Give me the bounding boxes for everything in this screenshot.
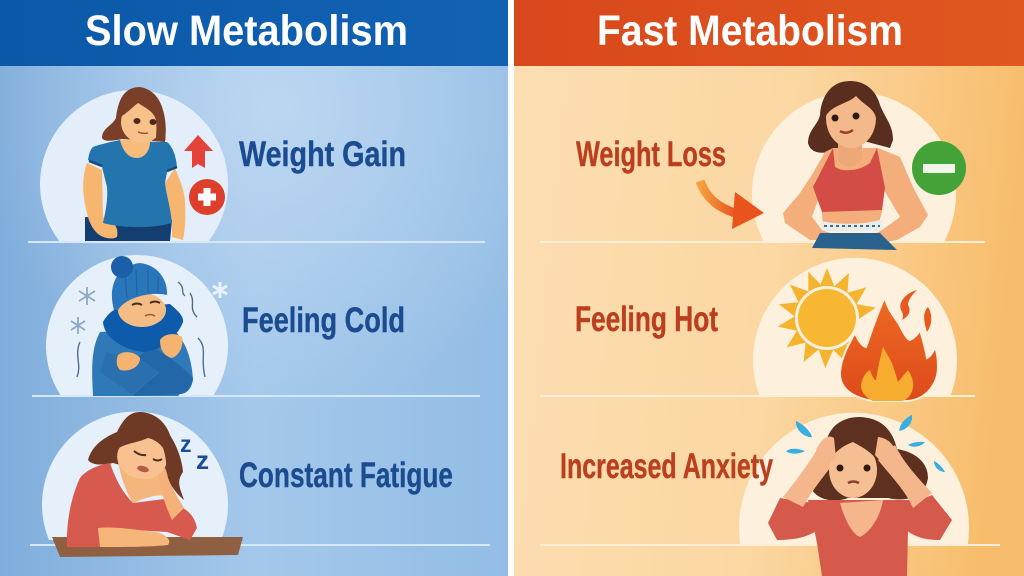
illustration: woman shivering in scarf and hat [92,256,193,396]
icon: sleep letters: z [196,445,209,475]
panel background: orange [514,66,1024,576]
divider line [28,241,485,243]
illustration: tired woman resting head [67,412,197,547]
header bar: slow metabolism: Slow Metabolism [85,7,408,55]
backdrop circle: feeling hot [753,258,957,396]
icon: flame [840,290,938,401]
symptom row: constant fatigue [30,412,490,557]
illustration: anxious woman holding head [768,417,952,576]
icon: sleep letters: z [180,431,192,457]
table [52,537,243,557]
divider line [32,395,480,397]
icon: sun [776,268,878,368]
symptom row: feeling hot [540,258,975,401]
divider line [540,241,985,243]
symptom row: weight loss [540,81,985,250]
icon: sweat drops [786,415,945,472]
icon: up arrow [184,135,213,168]
panel: fast metabolism [514,0,1024,576]
icon: minus badge [912,141,966,195]
panel background: blue [0,66,508,576]
backdrop circle: weight loss [752,92,956,242]
symptom row: increased anxiety [540,413,1000,576]
backdrop circle: constant fatigue [42,412,228,540]
label: feeling cold: Feeling Cold [242,301,405,340]
label: weight gain: Weight Gain [239,135,406,174]
illustration: woman with weight gain [83,87,185,241]
illustration: slim woman with measuring tape [783,81,928,250]
backdrop circle: increased anxiety [739,413,969,545]
icon: snowflakes [71,282,227,334]
divider line [540,544,1000,546]
icon: curved arrow [700,181,764,229]
label: increased anxiety: Increased Anxiety [560,447,773,486]
divider line [30,544,490,546]
icon: sleep letters [180,431,209,475]
header bar: fast metabolism [514,0,1024,66]
symptom row: feeling cold [32,255,480,397]
backdrop circle: feeling cold [46,255,228,396]
header bar: fast metabolism: Fast Metabolism [597,7,903,55]
label: weight loss: Weight Loss [576,135,726,174]
label: feeling hot: Feeling Hot [575,300,718,339]
label: constant fatigue: Constant Fatigue [239,456,453,495]
backdrop circle: weight gain [40,90,228,242]
symptom row: weight gain [28,87,485,243]
header bar: slow metabolism [0,0,508,66]
panel: slow metabolism [0,0,508,576]
icon: plus badge [189,179,225,215]
icon: shiver lines [77,282,205,377]
divider line [540,395,975,397]
